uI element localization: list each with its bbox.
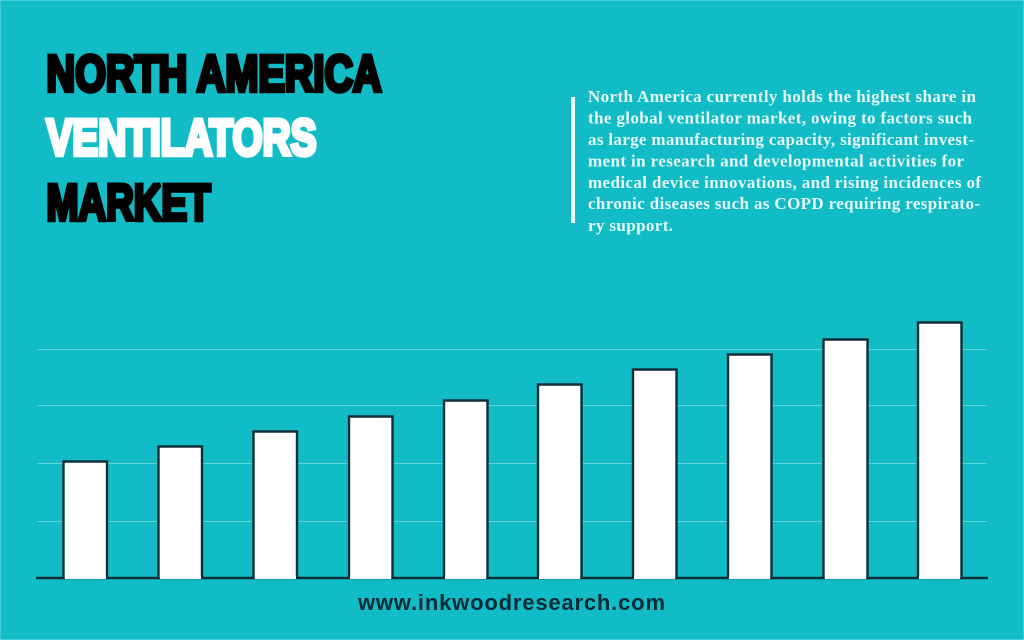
description text	[588, 87, 981, 235]
bar 3	[254, 432, 297, 578]
bar 6	[538, 384, 582, 578]
description text: medical device innovations, and rising incidences of	[588, 173, 981, 192]
bar 8	[728, 354, 772, 578]
bar 4	[349, 416, 392, 578]
title	[46, 45, 382, 231]
description callout	[571, 87, 981, 235]
website url: www.inkwoodresearch.com	[357, 590, 665, 615]
bar 7	[633, 370, 676, 578]
bar 2	[158, 446, 202, 578]
bar chart	[36, 322, 988, 579]
title line: Ventilators: VENTILATORS	[46, 109, 316, 166]
callout accent bar	[571, 97, 575, 223]
description text: chronic diseases such as COPD requiring respirato-	[588, 194, 980, 213]
description text: the global ventilator market, owing to factors such	[588, 108, 973, 128]
description text: as large manufacturing capacity, significant invest-	[588, 130, 974, 149]
bar 10	[918, 322, 962, 578]
title line: Market: MARKET	[46, 174, 210, 231]
bar 5	[444, 400, 488, 578]
description text: ry support.	[588, 216, 673, 235]
bars	[64, 322, 962, 578]
bar 9	[824, 340, 868, 578]
bar bottom fill over axis	[65, 576, 960, 579]
title line: North America: NORTH AMERICA	[46, 45, 382, 102]
description text: North America currently holds the highest share in	[588, 87, 977, 106]
bar 1	[64, 462, 107, 578]
grid lines	[37, 350, 987, 522]
description text: ment in research and developmental activities for	[588, 152, 964, 170]
baseline axis	[36, 577, 988, 579]
